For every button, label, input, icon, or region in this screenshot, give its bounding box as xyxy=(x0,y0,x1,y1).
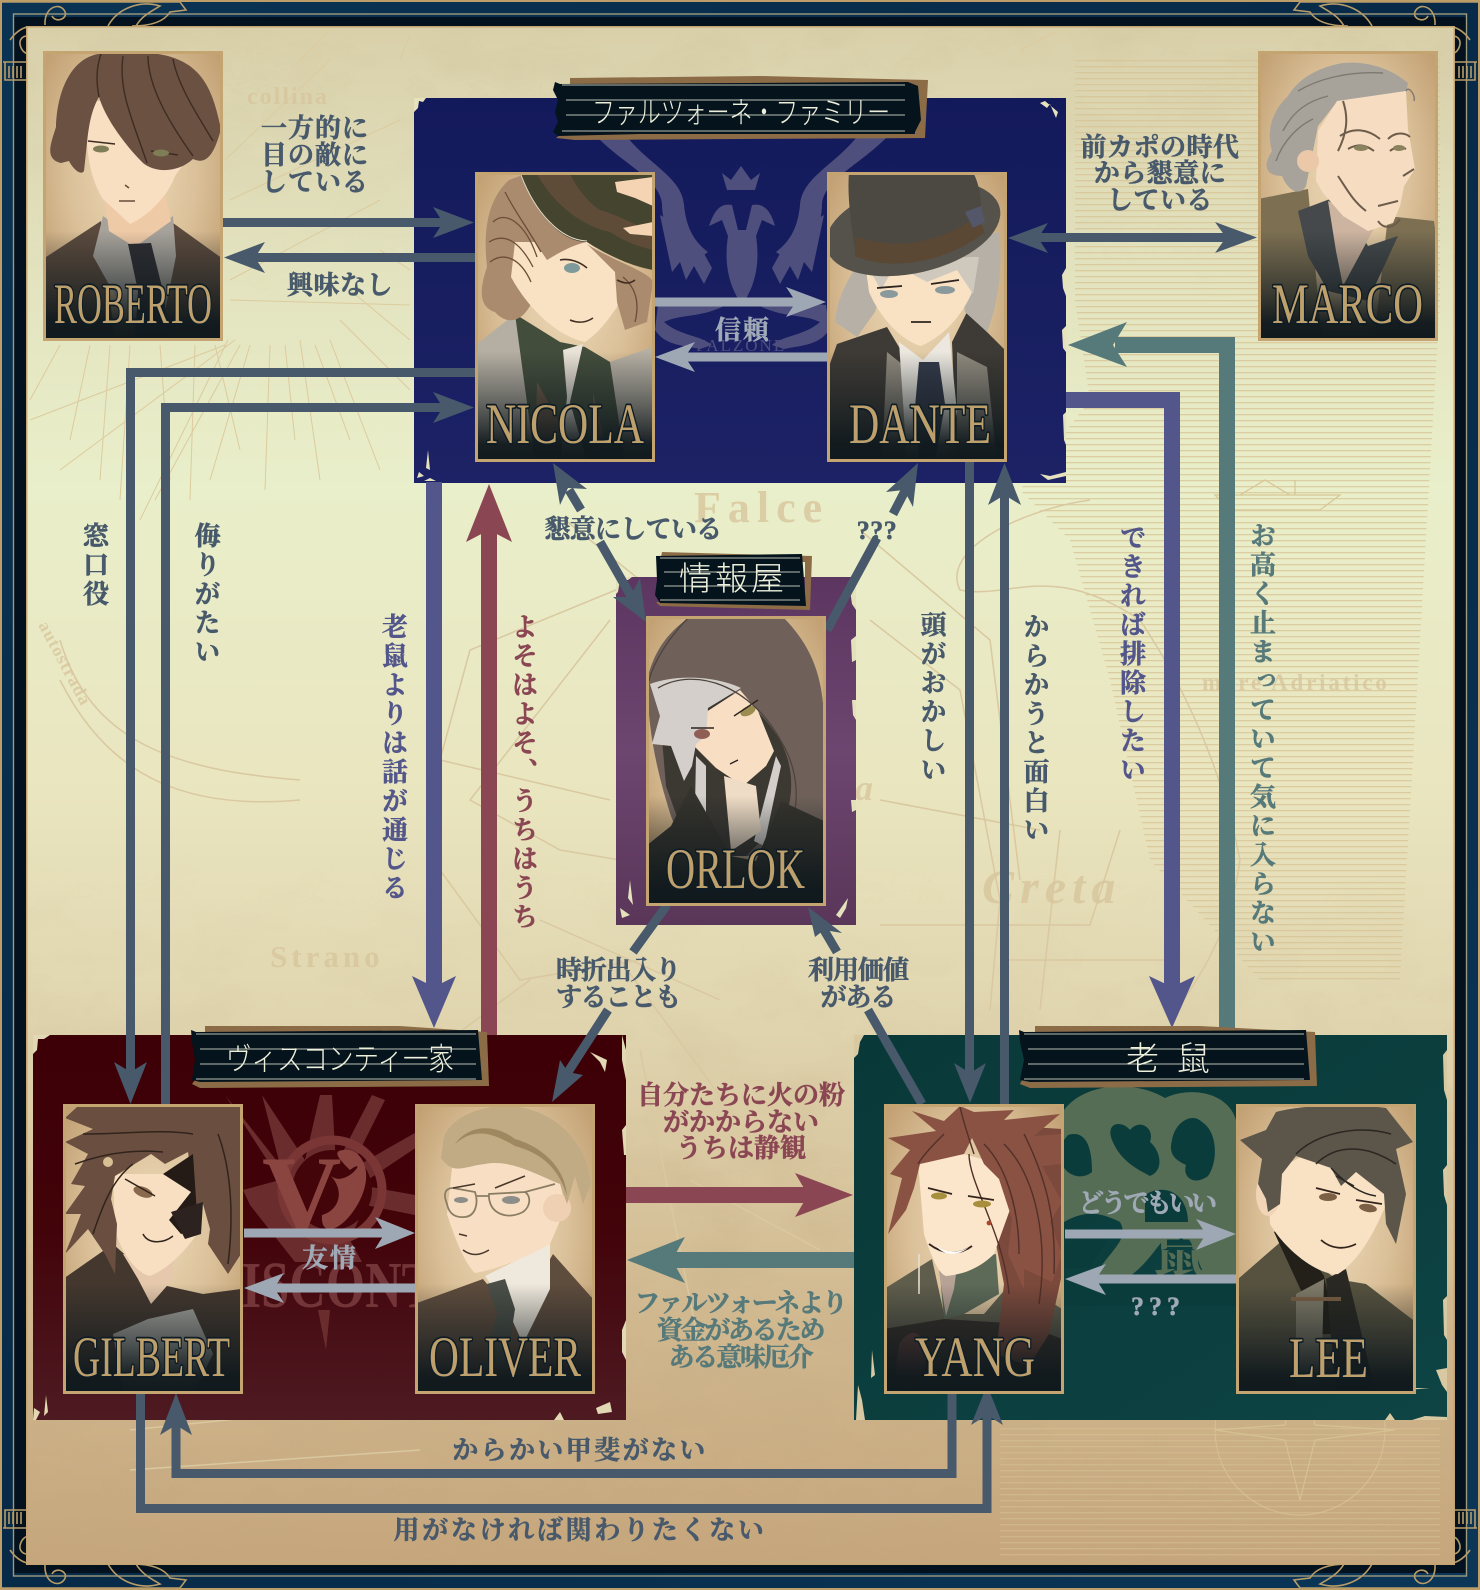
arrow: Yang to Lee xyxy=(1065,1219,1236,1250)
title bar: Rat xyxy=(1019,1026,1317,1088)
label: Falzone on Visconti: 老鼠よりは話が通じる xyxy=(378,613,408,903)
parchment map background: mare Adriatico xyxy=(1202,670,1390,695)
label: Roberto to Nicola: 一方的に xyxy=(261,114,369,143)
arrow: Visconti to Rat xyxy=(626,1173,853,1217)
panel: Visconti family xyxy=(33,1035,626,1420)
arrow: Rat to Falzone xyxy=(1068,322,1227,1035)
paper tears: Visconti panel xyxy=(33,1035,626,1420)
label: Gilbert respect: 侮りがたい xyxy=(191,522,220,667)
label: Visconti on Falzone: よそはよそ、うちはうち xyxy=(508,613,538,932)
label: Yang on Dante: からかうと面白い xyxy=(1020,613,1049,845)
card: Gilbert xyxy=(63,1104,243,1394)
label: Marco to Dante: から懇意に xyxy=(1094,159,1226,188)
label: Orlok to Oliver: 時折出入り xyxy=(556,955,680,985)
label: Yang on Gilbert: からかい甲斐がない xyxy=(452,1436,708,1465)
arrow: Yang to Orlok xyxy=(808,907,922,1104)
label: Dante on Yang: 頭がおかしい xyxy=(917,611,946,785)
label: Roberto to Nicola: 目の敵に xyxy=(261,141,369,170)
label: Roberto to Nicola: している xyxy=(261,168,369,197)
arrow: Orlok to Dante xyxy=(827,463,918,630)
label: Visconti on Rat: 自分たちに火の粉 xyxy=(637,1081,845,1110)
arrow: Lee to Yang xyxy=(1065,1264,1236,1295)
arrow: Falzone to Visconti xyxy=(412,482,456,1028)
label: Visconti on Rat: がかからない xyxy=(663,1108,819,1137)
title bar: Falzone family: ファルツォーネ・ファミリー xyxy=(592,88,890,132)
label: Yang on Lee: どうでもいい xyxy=(1078,1189,1216,1218)
label: Nicola and Orlok: 懇意にしている xyxy=(544,515,722,544)
label: Nicola contact: 窓口役 xyxy=(80,522,110,609)
label: Marco to Dante: 前カポの時代 xyxy=(1080,133,1240,162)
label: Lee on Yang: ??? xyxy=(1131,1292,1185,1321)
label: Nicola to Roberto: 興味なし xyxy=(287,271,393,300)
label: Dante and Orlok: ??? xyxy=(857,516,897,545)
paper tears: Rat panel xyxy=(854,1035,1447,1420)
label: Visconti on Rat: うちは静観 xyxy=(676,1134,806,1163)
emblem: Rat flower crest xyxy=(1064,1086,1236,1306)
label: Rat on Visconti: 資金があるため xyxy=(657,1316,823,1345)
label: Falzone on Rat: できれば排除したい xyxy=(1116,524,1146,785)
panel: Rat syndicate xyxy=(854,1035,1447,1420)
arrow: Nicola and Orlok xyxy=(553,463,646,622)
parchment map background: autostrada xyxy=(34,617,96,709)
parchment map background: collina xyxy=(247,84,329,110)
emblem: Visconti crest xyxy=(205,1095,455,1350)
arrow: Dante and Marco xyxy=(1008,222,1257,253)
label: trust: 信頼 xyxy=(715,316,771,345)
emblem: Falzone eagle crest xyxy=(598,138,886,355)
parchment map background: Creta xyxy=(982,861,1121,914)
label: Marco to Dante: している xyxy=(1107,186,1213,215)
arrow: Orlok to Oliver xyxy=(552,905,667,1102)
label: Yang to Orlok: 利用価値 xyxy=(808,956,909,985)
title bar: Visconti family xyxy=(191,1026,489,1088)
arrow: Oliver to Gilbert xyxy=(244,1273,415,1303)
card: Roberto xyxy=(43,51,223,341)
card: Orlok xyxy=(646,616,826,906)
card: Nicola xyxy=(475,172,655,462)
label: Rat on Visconti: ある意味厄介 xyxy=(669,1343,814,1372)
arrow: Yang to Dante xyxy=(988,463,1021,1104)
card: Lee xyxy=(1236,1104,1416,1394)
arrow: Gilbert to Yang xyxy=(140,1385,1003,1508)
paper tears: Falzone panel xyxy=(414,98,1066,481)
title bar: Rat: 老鼠 xyxy=(1126,1032,1228,1080)
emblem: Visconti crest: VISCONTI xyxy=(205,1249,455,1322)
title bar: Visconti family: ヴィスコンティ一家 xyxy=(226,1034,454,1079)
arrow: Dante to Yang xyxy=(954,462,986,1103)
label: Yang to Orlok: がある xyxy=(820,983,896,1012)
arrow: Visconti to Falzone xyxy=(466,484,512,1035)
label: Orlok to Oliver: することも xyxy=(556,983,680,1012)
card: Lee: LEE xyxy=(1289,1327,1368,1390)
arrow: Roberto to Nicola xyxy=(223,207,474,238)
arrow: Nicola to Dante xyxy=(655,287,826,317)
card: Oliver xyxy=(415,1104,595,1394)
card: Marco xyxy=(1258,51,1438,341)
parchment map background: Falce xyxy=(694,483,829,532)
title bar: Orlok: 情報屋 xyxy=(679,552,787,600)
parchment map background: Strano xyxy=(270,939,384,974)
panel: Orlok information broker xyxy=(616,577,856,925)
emblem: Falzone eagle crest: FALZONE xyxy=(696,336,786,355)
card: Yang xyxy=(884,1104,1064,1394)
card: Dante xyxy=(816,164,1010,462)
label: Rat on Visconti: ファルツォーネより xyxy=(634,1289,846,1318)
arrow: Dante to Nicola xyxy=(655,342,827,372)
label: Rat on Falzone: お高く止まっていて気に入らない xyxy=(1246,522,1276,957)
arrow: Nicola to Roberto xyxy=(224,242,475,273)
arrow: Yang to Gilbert xyxy=(160,1393,952,1474)
title bar: Orlok xyxy=(655,552,812,610)
arrow: Falzone to Rat xyxy=(1066,400,1195,1028)
arrow: Rat to Visconti xyxy=(627,1237,854,1283)
title bar: Falzone family xyxy=(553,76,928,140)
parchment map background: a xyxy=(855,768,873,808)
panel: Falzone family xyxy=(414,98,1066,483)
label: Gilbert on Yang: 用がなければ関わりたくない xyxy=(393,1516,767,1545)
arrow: Nicola to Gilbert xyxy=(114,372,475,1104)
emblem: Rat flower crest: 鼠 xyxy=(1153,1211,1207,1288)
label: friendship: 友情 xyxy=(302,1244,358,1273)
arrow: Gilbert to Oliver xyxy=(244,1217,415,1249)
emblem: Visconti crest: V xyxy=(262,1134,341,1256)
arrow: Gilbert to Nicola xyxy=(166,392,474,1104)
